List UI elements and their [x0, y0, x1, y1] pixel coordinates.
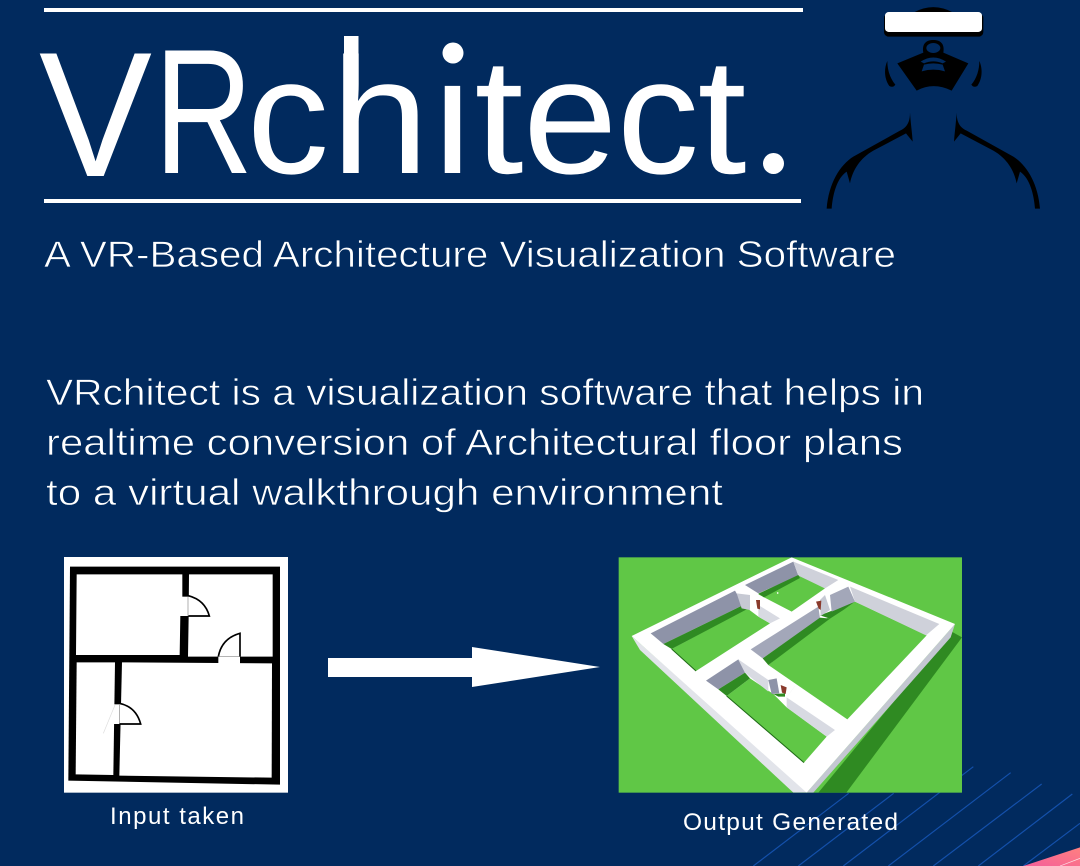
title: h: [331, 24, 429, 208]
title: V: [39, 15, 152, 214]
title: [39, 12, 790, 214]
description text: to a virtual walkthrough environment: [46, 472, 724, 513]
subtitle: A VR-Based Architecture Visualization Software: [44, 234, 896, 275]
title: t: [698, 24, 746, 208]
title: R: [154, 12, 253, 211]
description text: VRchitect is a visualization software that helps in: [46, 372, 924, 413]
arrow: [328, 647, 600, 687]
top rule: [44, 8, 803, 12]
description text: realtime conversion of Architectural floor plans: [46, 422, 903, 463]
input floor plan image: [64, 557, 288, 793]
title: c: [617, 24, 699, 208]
title: c: [247, 24, 329, 208]
caption: input: Input taken: [110, 803, 244, 830]
room left: [672, 608, 770, 671]
room top: [758, 575, 825, 612]
caption: output: Output Generated: [683, 809, 898, 836]
title: t: [474, 24, 524, 208]
title: i: [433, 24, 472, 208]
icon: VR headset figure: [827, 7, 1040, 209]
title: e: [523, 24, 618, 208]
title: .: [757, 62, 790, 196]
bottom rule: [44, 199, 801, 203]
room right: [768, 602, 927, 719]
description text: [46, 372, 924, 513]
room bottom: [727, 678, 827, 763]
decorative diagonal lines corner: [753, 767, 1080, 866]
output 3D model image: [619, 557, 962, 797]
